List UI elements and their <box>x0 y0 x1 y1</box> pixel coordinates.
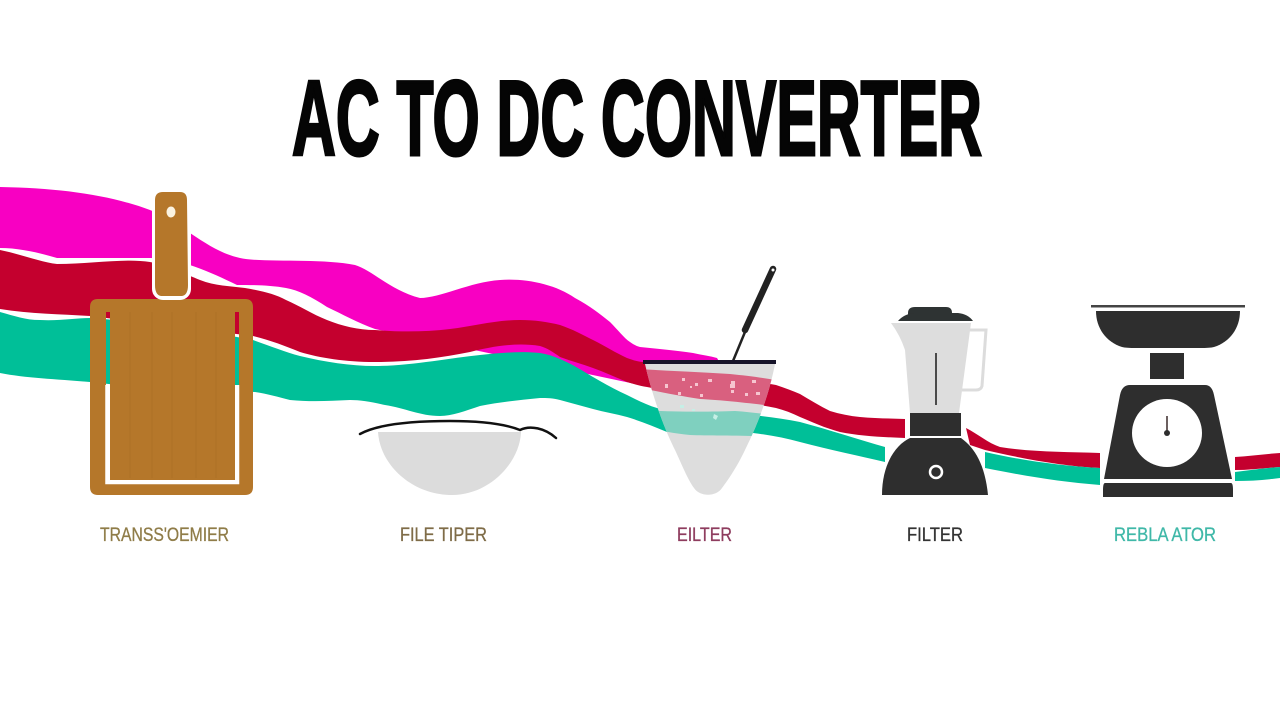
board panel <box>110 304 235 480</box>
scale foot <box>1103 483 1233 497</box>
bowl rim <box>360 421 556 438</box>
green wave <box>0 312 885 462</box>
magenta wave <box>0 187 730 385</box>
label: filter one: EILTER <box>677 525 732 546</box>
blender jar <box>891 323 971 413</box>
cone rim <box>643 360 776 364</box>
board top band <box>100 301 245 312</box>
scale needle <box>1166 416 1168 432</box>
blender lid <box>898 313 973 321</box>
bowl body <box>378 432 521 495</box>
cone <box>645 364 775 495</box>
blender lid top <box>908 307 952 320</box>
green wave, right section <box>985 452 1100 485</box>
red wave, right section <box>966 428 1100 468</box>
blender collar <box>910 413 961 436</box>
scale bowl <box>1096 311 1240 348</box>
handle outline <box>152 190 191 300</box>
needle pivot <box>1164 430 1170 436</box>
red wave <box>0 250 905 438</box>
scale stem <box>1150 353 1184 379</box>
scale dial <box>1132 399 1202 467</box>
jar centre line <box>935 353 937 405</box>
scale body <box>1104 385 1232 479</box>
label: rectifier: FILE TIPER <box>400 525 487 546</box>
label: regulator: REBLA ATOR <box>1114 525 1216 546</box>
pink liquid <box>646 370 772 405</box>
icon: blender <box>882 307 988 495</box>
green wave, far right <box>1235 467 1280 481</box>
wave bands: AC to DC signal <box>0 187 1280 485</box>
bubbles <box>680 405 718 420</box>
contents of the cone <box>646 370 772 436</box>
board grain <box>130 312 216 478</box>
speckles <box>665 378 760 397</box>
icon: kitchen scale <box>1091 305 1245 497</box>
infographic canvas <box>0 78 1280 542</box>
white lower slot lines <box>108 385 237 482</box>
red wave, far right <box>1235 453 1280 470</box>
board frame with see-through slots <box>90 299 253 495</box>
spoon hole <box>772 268 774 272</box>
label: transformer: TRANSS'OEMIER <box>100 525 229 546</box>
blender handle <box>962 330 986 390</box>
scale plate line <box>1091 305 1245 308</box>
spoon thin stem <box>733 332 745 361</box>
icon: filter cone with spoon <box>640 268 780 495</box>
icon: bowl with rim <box>360 421 556 495</box>
spoon handle <box>745 269 773 330</box>
blender button <box>930 466 942 478</box>
blender base <box>882 438 988 495</box>
handle hole <box>166 206 176 218</box>
handle <box>155 192 188 296</box>
icon: transformer drawn as cutting board <box>90 190 253 495</box>
label: filter two: FILTER <box>907 525 963 546</box>
teal liquid <box>658 410 761 436</box>
